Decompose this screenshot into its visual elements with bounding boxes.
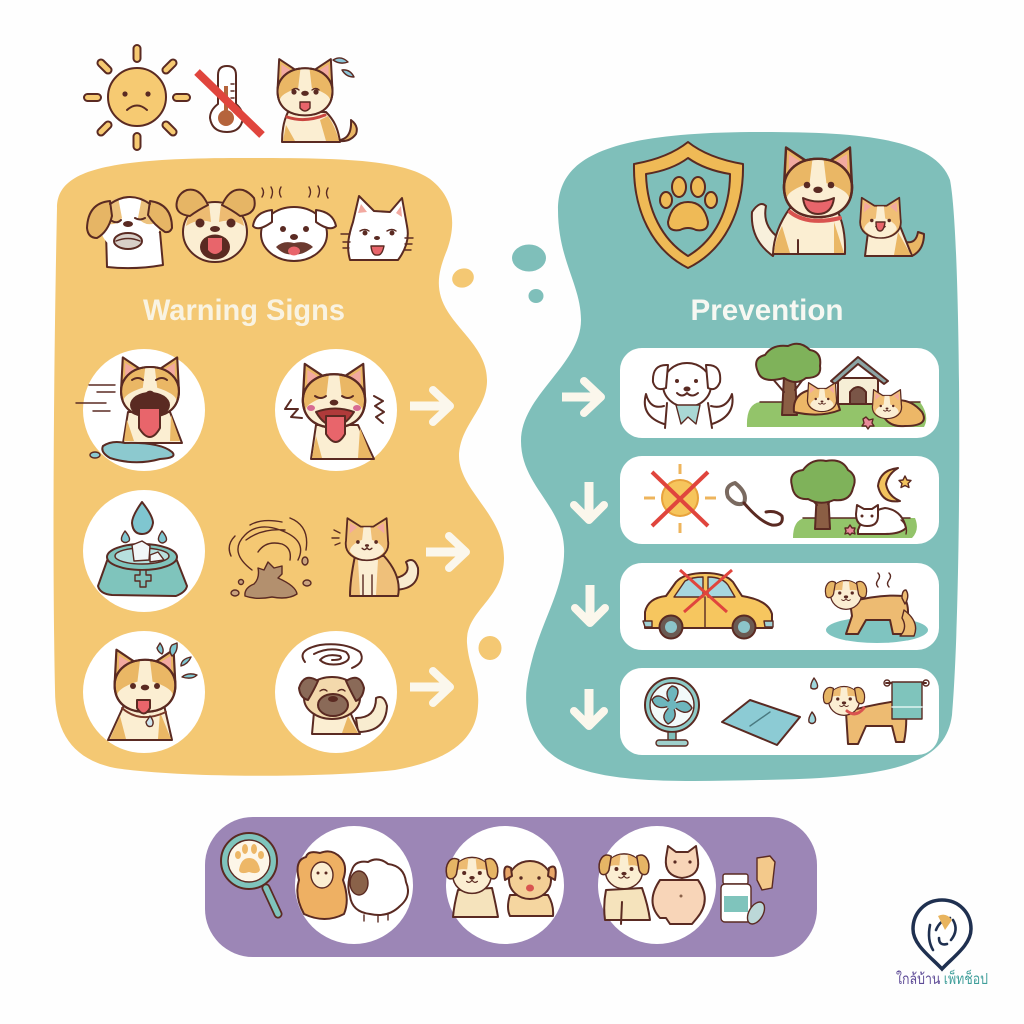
panel: four stressed pets: [87, 186, 413, 268]
decorative blob: teal small: [528, 289, 544, 303]
arrow: prevention row 3: [575, 585, 605, 623]
arrow: warning row 1: [410, 390, 450, 422]
arrow: warning row 3: [410, 671, 450, 703]
heading: Warning Signs: Warning Signs: [143, 294, 345, 327]
warning item: dizzy and shaking dog: [275, 349, 397, 471]
arrow: warning row 2: [426, 536, 466, 568]
icon: crossed-out sun: [644, 464, 716, 533]
icon: fan: [645, 678, 699, 746]
panel header: shield and happy pets: [634, 142, 924, 268]
panel: high-risk pets: [205, 817, 817, 957]
icon: resting cats: [794, 383, 924, 429]
circle: flat-faced breeds: [446, 826, 564, 944]
decorative blob: yellow upper: [449, 265, 477, 291]
panel: cooling tools: [620, 668, 939, 755]
arrow: prevention row 1: [562, 381, 601, 413]
icon: medicine bottle: [721, 874, 751, 922]
warning item: vomit pile: [229, 518, 311, 598]
icon: crossed-out thermometer: [197, 66, 262, 135]
icon: cooling mat: [722, 700, 800, 745]
icon: overheating white dog: [253, 186, 336, 261]
icon: sad sun: [84, 45, 190, 150]
icon: happy small cat: [860, 198, 924, 256]
icon: yellow car crossed: [643, 570, 773, 638]
panel: never leave in a car: [620, 563, 939, 650]
icon: tree with moon: [791, 460, 917, 538]
icon: medical tag: [757, 856, 775, 890]
icon group: heat warning: [84, 45, 357, 150]
circle: thick-coated pets: [295, 826, 413, 944]
warning item: dizzy pug: [275, 631, 397, 753]
panel: avoid midday walks: [620, 456, 939, 544]
icon: tree on grass: [747, 344, 926, 427]
circle: senior and overweight pets: [598, 826, 716, 944]
logo text: ใกล้บ้าน เพ็ทช็อป: [896, 969, 988, 988]
icon: line-art dog with bandana: [645, 363, 733, 428]
panel: warning signs: [54, 158, 504, 776]
icon: panting dog: [176, 190, 255, 262]
icon: paw shield: [634, 142, 743, 268]
warning item: sitting cat: [332, 518, 418, 596]
warning item: water bowl: [83, 490, 205, 612]
icon: pill case: [744, 899, 768, 927]
icon: sweating dog: [277, 58, 357, 142]
panel: shade and shelter: [620, 344, 939, 438]
icon: magnifier with paw: [221, 833, 278, 914]
icon: dog on cool puddle: [825, 573, 928, 643]
panel: prevention: [521, 132, 959, 781]
warning item: excessive panting and drool: [76, 349, 205, 471]
arrow: prevention row 4: [574, 689, 604, 726]
icon: dog house: [831, 357, 888, 404]
icon: lying white cat: [845, 505, 906, 535]
icon: dog with towel: [809, 678, 929, 744]
icon: grimacing dog: [87, 197, 172, 268]
arrow: prevention row 2: [574, 482, 604, 520]
icon: white cat: [341, 196, 413, 260]
decorative blob: teal large: [512, 244, 546, 272]
warning item: drooling dog with sweat: [83, 631, 205, 753]
logo: pet shop pin: [896, 900, 988, 988]
icon: happy dog: [752, 148, 852, 256]
icon: leash: [727, 483, 782, 525]
heading: Prevention: Prevention: [690, 294, 844, 327]
decorative blob: yellow lower: [478, 636, 502, 660]
